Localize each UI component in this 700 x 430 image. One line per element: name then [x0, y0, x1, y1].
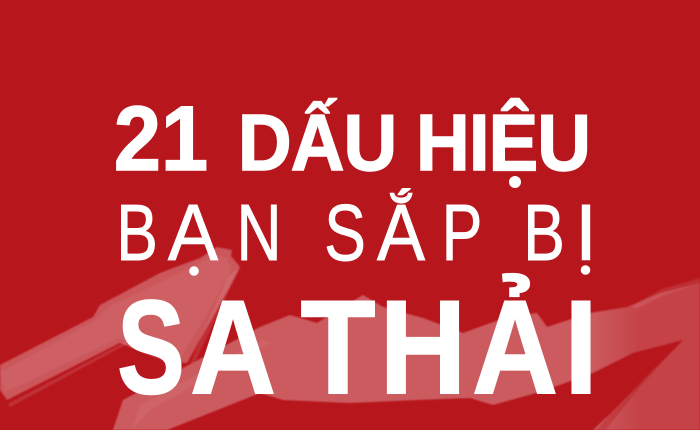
number 21: 21 [114, 87, 208, 190]
title line 3: SA THẢI: I [564, 272, 598, 421]
title line 3: SA THẢI [117, 272, 598, 422]
title line 2: BẠN SẮP BỊ: Ị [575, 188, 597, 277]
title line 1: 21 DẤU HIỆU [116, 98, 588, 188]
title line 2: BẠN SẮP BỊ: N [236, 189, 282, 278]
words DẤU HIỆU: DẤU HIỆU [238, 96, 590, 188]
title line 3: SA THẢI: A [190, 273, 276, 422]
title line 2: BẠN SẮP BỊ: B [523, 189, 565, 278]
title line 2: BẠN SẮP BỊ: P [442, 189, 482, 278]
title line 2: BẠN SẮP BỊ: S [324, 189, 366, 278]
title line 2: BẠN SẮP BỊ: Ắ [377, 187, 425, 278]
title line 2: BẠN SẮP BỊ: Ạ [168, 189, 218, 278]
dot below Ệ [509, 176, 521, 188]
title line 3: SA THẢI: T [301, 273, 375, 422]
title line 2: BẠN SẮP BỊ [116, 187, 597, 278]
brush stroke: left [0, 247, 240, 407]
brush stroke: right [113, 278, 700, 430]
title line 2: BẠN SẮP BỊ: B [116, 189, 158, 278]
title line 3: SA THẢI: Ả [472, 273, 558, 422]
title line 3: SA THẢI: H [380, 272, 466, 421]
title line 3: SA THẢI: S [117, 274, 185, 422]
